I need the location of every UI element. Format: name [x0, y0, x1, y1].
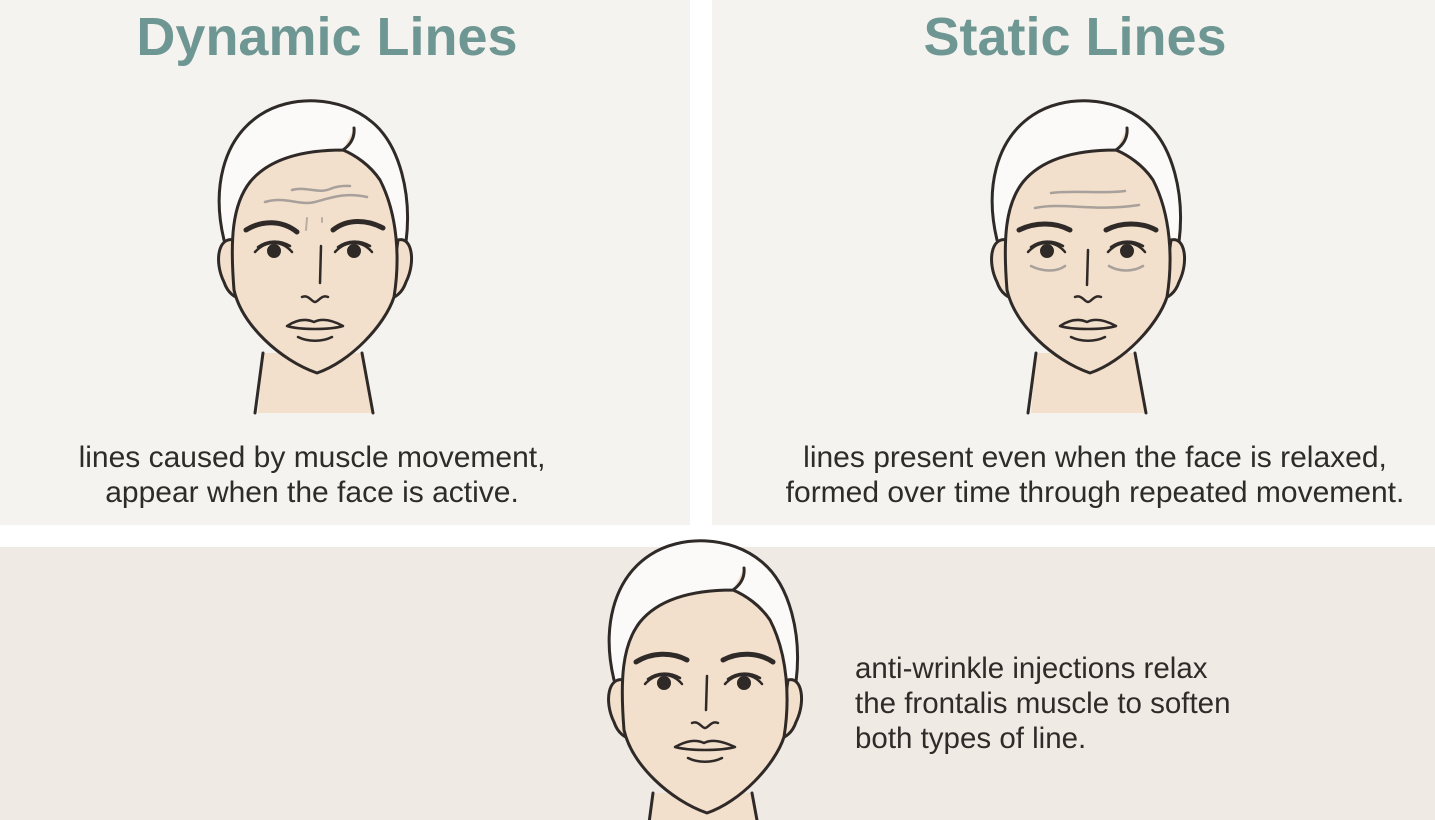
text: dynamic description: lines caused by muscle movement,: [79, 441, 545, 474]
panel: treatment: [0, 547, 1435, 820]
text: static description: formed over time through repeated movement.: [786, 476, 1404, 509]
icon: relaxed face: [609, 541, 802, 820]
text: treatment description: the frontalis muscle to soften: [855, 687, 1230, 720]
text: treatment description: anti-wrinkle injections relax: [855, 652, 1208, 685]
text: dynamic description: appear when the face is active.: [105, 476, 519, 509]
icon: static face: [992, 101, 1185, 413]
title: static lines: Static Lines: [923, 7, 1227, 67]
text: static description: [786, 441, 1404, 509]
text: dynamic description: [79, 441, 545, 509]
text: treatment description: both types of line.: [855, 722, 1086, 755]
text: treatment description: [855, 652, 1230, 755]
title: dynamic lines: Dynamic Lines: [136, 7, 518, 67]
panel: dynamic lines: [0, 0, 690, 525]
text: static description: lines present even when the face is relaxed,: [803, 441, 1387, 474]
icon: dynamic face: [219, 101, 412, 413]
panel: static lines: [712, 0, 1435, 525]
